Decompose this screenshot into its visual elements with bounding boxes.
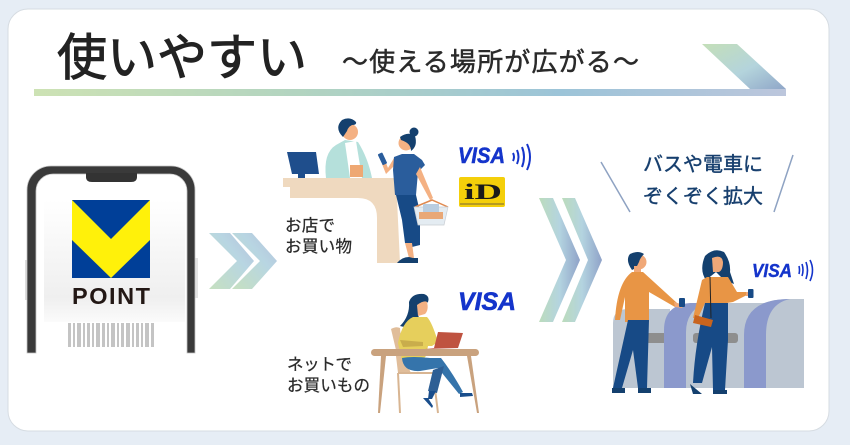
notch: [86, 173, 137, 182]
hair: [400, 294, 428, 328]
callout text: バスや電車に: [643, 153, 763, 176]
V POINT logo: [72, 200, 150, 278]
head: [398, 136, 414, 150]
feet: [423, 391, 473, 408]
phone body: [27, 166, 195, 353]
logo: VISA contactless: [458, 143, 530, 170]
woman: [690, 250, 754, 394]
phone screen shading: [44, 200, 185, 322]
label: shop: お店で: [285, 216, 335, 235]
illustration: woman at laptop: [371, 294, 479, 413]
title: 使いやすい: [57, 30, 307, 86]
trousers: [396, 195, 420, 247]
customer: [378, 128, 433, 263]
clerk: [325, 118, 372, 178]
label: online: お買いもの: [287, 376, 370, 395]
illustration: ticket gates with passengers: [612, 250, 804, 394]
barcode: [68, 323, 154, 347]
arm: [400, 340, 423, 347]
label: shop: お買い物: [285, 237, 352, 256]
top: [393, 154, 425, 195]
logo: VISA contactless: VISA: [458, 143, 505, 168]
POINT label: POINT: [72, 283, 151, 309]
illustration: shop counter with clerk and customer: [283, 118, 448, 263]
subtitle: ～使える場所が広がる～: [342, 47, 639, 77]
heading underline with arrow tail: [34, 44, 786, 96]
logo: VISA: VISA: [458, 288, 516, 316]
shopping basket: [414, 200, 448, 225]
chair: [391, 327, 411, 373]
table: [371, 349, 479, 413]
arm to basket: [416, 167, 433, 200]
logo: iD: [459, 177, 505, 207]
monitor: [287, 152, 319, 179]
arm holding phone: [382, 158, 396, 174]
counter: [283, 178, 400, 263]
trousers: [402, 357, 463, 394]
logo: VISA contactless on gate: VISA: [752, 261, 792, 281]
gates: [613, 299, 804, 388]
arrow: double chevron to transit: [539, 198, 602, 322]
callout line right: [774, 155, 793, 212]
icon: smartphone with V POINT: [25, 166, 198, 353]
arrow: double chevron to shops: [209, 233, 277, 289]
logo: VISA contactless on gate: [752, 260, 812, 281]
man: [612, 252, 685, 393]
callout line left: [601, 162, 630, 212]
laptop: [425, 332, 463, 349]
callout: transit expansion: [601, 153, 793, 212]
logo: iD: iD: [464, 179, 502, 204]
label: online: ネットで: [287, 355, 352, 374]
callout text: ぞくぞく拡大: [643, 185, 763, 208]
sweater: [398, 317, 438, 362]
